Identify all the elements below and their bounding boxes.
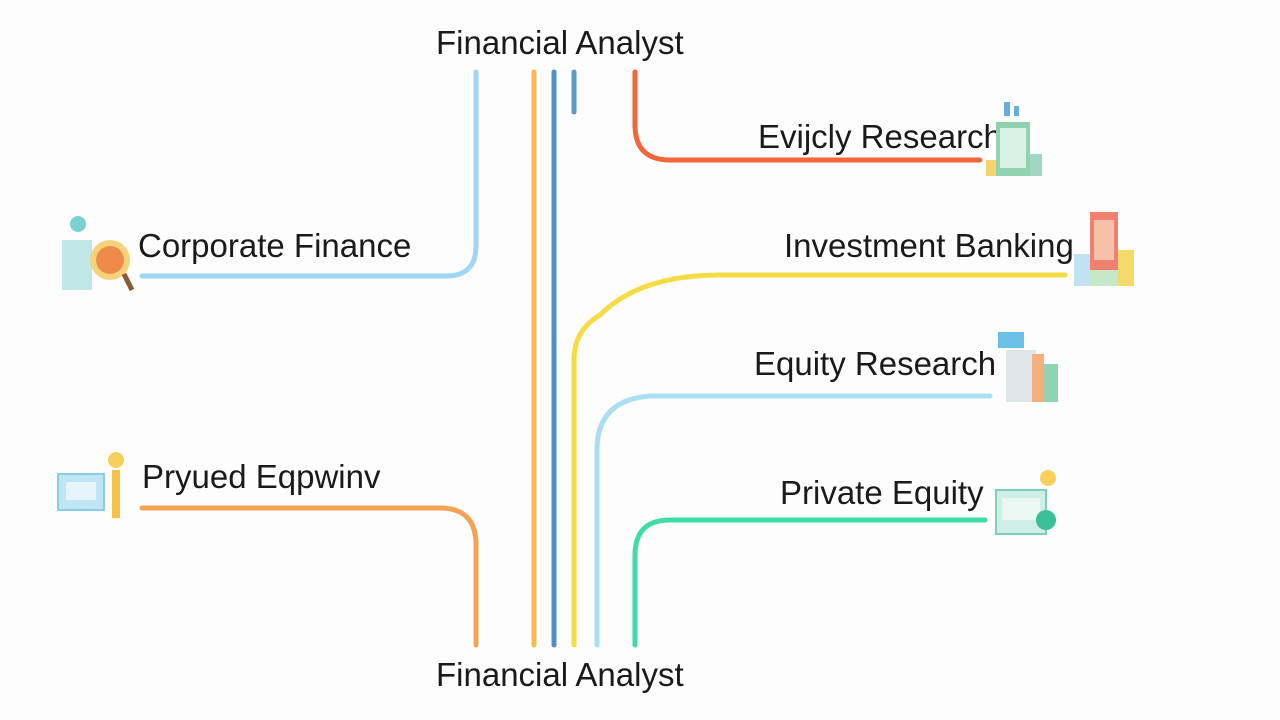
- icon: investment banking: [1074, 212, 1134, 286]
- label: corporate finance: Corporate Finance: [138, 227, 411, 264]
- line: equity research: [597, 396, 990, 645]
- line: investment banking: [574, 275, 1065, 645]
- line: central blue: [552, 72, 556, 645]
- line: short blue: [572, 72, 576, 112]
- label: pryued eqpwinv: Pryued Eqpwinv: [142, 458, 380, 495]
- icon: building green: [986, 102, 1042, 176]
- icon: private equity: [995, 470, 1056, 535]
- icon: equity research: [998, 332, 1058, 402]
- label: private equity: Private Equity: [780, 474, 984, 511]
- label: equity research: Equity Research: [754, 345, 996, 382]
- line: evijcly research: [635, 72, 980, 160]
- icon: corporate finance: [62, 216, 134, 292]
- line: central yellow: [532, 72, 536, 645]
- label: investment banking: Investment Banking: [784, 227, 1074, 264]
- line: private equity: [635, 520, 985, 645]
- icon: pryued eqpwinv: [57, 452, 124, 518]
- line: corporate finance: [142, 72, 476, 276]
- title bottom: Financial Analyst: [436, 656, 684, 693]
- line: pryued eqpwinv: [142, 508, 476, 645]
- label: evijcly research: Evijcly Research: [758, 118, 1002, 155]
- title top: Financial Analyst: [436, 24, 684, 61]
